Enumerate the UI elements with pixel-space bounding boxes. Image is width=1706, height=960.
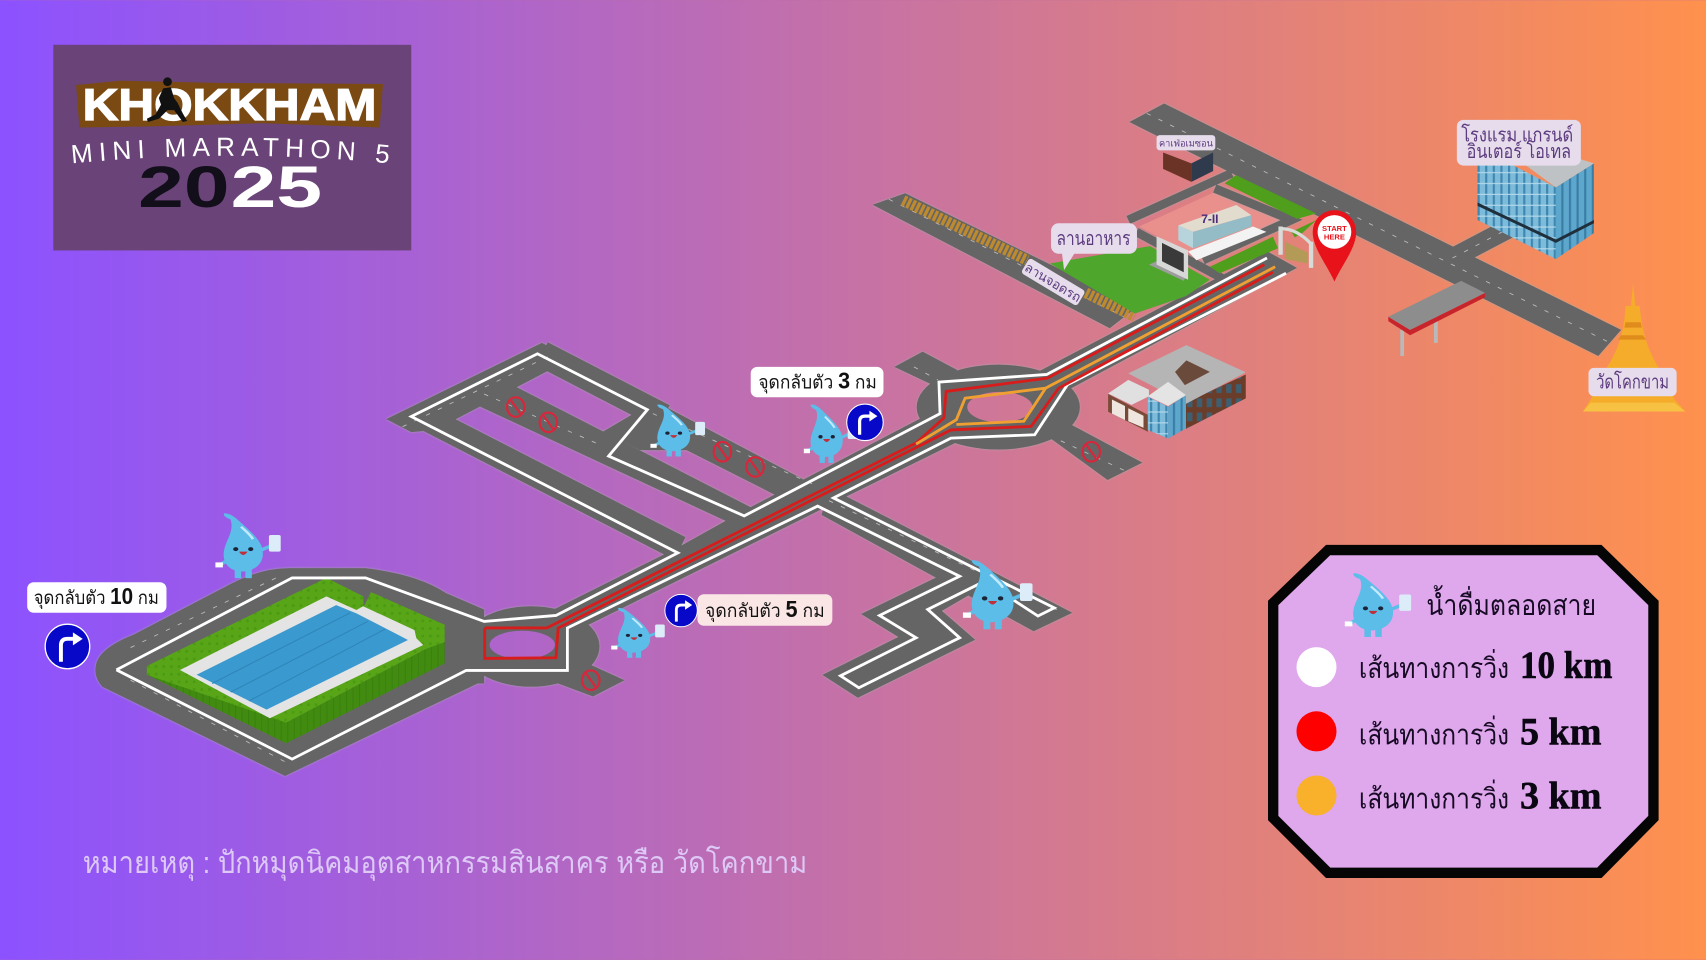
road: south-east long xyxy=(821,492,1072,631)
roundabout: north-east xyxy=(917,365,1080,450)
logo year xyxy=(138,155,322,220)
office low wing facade xyxy=(1108,394,1148,432)
label: hotel xyxy=(1457,120,1581,166)
start pin: START xyxy=(1322,224,1347,233)
road: south-east stub xyxy=(1039,419,1142,480)
lawn xyxy=(1050,246,1210,314)
route 10 km white xyxy=(116,258,1286,759)
pagoda xyxy=(1583,283,1685,411)
road: north-west stub xyxy=(894,352,957,386)
mascot: water drop 5 km xyxy=(611,608,665,658)
mascot: water drop by park xyxy=(215,513,281,578)
gas station xyxy=(1388,281,1485,356)
office glass tower xyxy=(1148,397,1168,438)
logo year: 20 xyxy=(138,155,230,220)
hotel left face xyxy=(1478,147,1556,259)
route 3 km orange xyxy=(916,267,1275,444)
road: hotel access xyxy=(1452,225,1515,258)
road: park loop xyxy=(95,568,484,776)
road network xyxy=(95,104,1621,776)
park with pool xyxy=(147,578,445,743)
road: service loop xyxy=(1128,173,1291,279)
icon: runner xyxy=(147,77,187,122)
hotel dark band xyxy=(1478,203,1594,243)
lane dashes xyxy=(131,113,1610,762)
building: cafe xyxy=(1157,135,1215,182)
building: office block xyxy=(1108,345,1246,438)
label: temple: วัดโคกขาม xyxy=(1596,371,1669,394)
legend 10 km: เส้นทางการวิ่ง xyxy=(1359,649,1509,684)
pool water xyxy=(197,605,408,710)
roundabout: south-west xyxy=(462,606,599,687)
callout: u-turn 5 km: จุดกลับตัว 5 กม xyxy=(705,596,825,623)
icon: turn sign 10 km xyxy=(45,624,90,669)
road: parking lot xyxy=(873,193,1137,328)
convenience store lot xyxy=(1139,193,1284,261)
footnote: หมายเหตุ : ปักหมุดนิคมอุตสาหกรรมสินสาคร หรือ วัดโคกขาม xyxy=(83,845,807,882)
legend water: น้ำดื่มตลอดสาย xyxy=(1426,585,1596,621)
hedge side xyxy=(147,642,445,743)
parking row xyxy=(903,200,1135,317)
logo subtitle: MINI MARATHON 5 xyxy=(72,138,388,164)
road: upper long xyxy=(542,354,664,417)
road: small stub xyxy=(549,658,625,697)
legend 5 km: เส้นทางการวิ่ง xyxy=(1359,715,1509,750)
billboard xyxy=(1149,236,1188,281)
legend mascot xyxy=(1345,573,1411,637)
legend 10 km: 10 km xyxy=(1520,644,1612,687)
legend 3 km xyxy=(1296,775,1602,818)
road: top highway xyxy=(1129,104,1621,356)
hotel roof xyxy=(1523,159,1594,187)
callout: u-turn 10 km: จุดกลับตัว 10 กม xyxy=(34,583,159,610)
label: parking: ลานจอดรถ xyxy=(1022,260,1084,305)
mascot: water drop upper block xyxy=(650,404,705,456)
no-entry signs xyxy=(507,397,1100,690)
office main roof xyxy=(1128,345,1246,404)
label: cafe: คาเฟ่อเมซอน xyxy=(1159,139,1214,149)
lane lines xyxy=(212,613,385,701)
legend 3 km: เส้นทางการวิ่ง xyxy=(1359,780,1509,815)
building: 7-Eleven xyxy=(1178,205,1266,260)
legend panel xyxy=(1273,550,1653,873)
label: food court: ลานอาหาร xyxy=(1056,228,1130,250)
logo year: 25 xyxy=(231,155,322,220)
roundabout islands xyxy=(490,392,1033,659)
label: 7-11: 7-II xyxy=(1201,212,1219,226)
hotel right face xyxy=(1556,163,1594,259)
logo panel xyxy=(53,44,412,250)
legend 5 km: 5 km xyxy=(1520,710,1602,753)
icon: turn sign 3 km xyxy=(847,404,883,441)
green strip south xyxy=(1210,237,1278,273)
road: lower long xyxy=(397,408,685,560)
road: upper block connector xyxy=(386,343,572,432)
logo title banner: KHOKKHAM xyxy=(83,81,376,130)
icon: turn sign 5 km xyxy=(665,594,697,627)
office courtyard xyxy=(1175,360,1210,385)
green strip corner xyxy=(1291,220,1316,237)
legend 5 km xyxy=(1296,710,1602,753)
mascot: water drop 3 km xyxy=(804,405,857,463)
mascot: water drop south-east xyxy=(963,560,1033,629)
callout: u-turn 3 km: จุดกลับตัว 3 กม xyxy=(758,368,877,395)
office low wing roof xyxy=(1108,380,1149,405)
office tower roof xyxy=(1148,382,1186,406)
pool deck xyxy=(180,596,423,718)
label: food court xyxy=(1051,223,1137,270)
road: zigzag branch xyxy=(840,576,974,688)
arch gate xyxy=(1278,226,1313,268)
route 5 km red xyxy=(485,265,1273,658)
green strip north xyxy=(1225,175,1316,219)
start pin xyxy=(1313,210,1356,282)
legend 3 km: 3 km xyxy=(1520,775,1602,818)
label: hotel: อินเตอร์ โอเทล xyxy=(1467,140,1571,163)
road: upper long continued with connector xyxy=(603,390,811,496)
office right facade xyxy=(1186,374,1246,429)
building: hotel xyxy=(1478,147,1594,259)
road: middle long xyxy=(479,379,751,524)
label: hotel: โรงแรม แกรนด์ xyxy=(1461,124,1573,147)
legend 10 km xyxy=(1296,644,1612,687)
hedge top xyxy=(147,578,445,723)
road: main south-west xyxy=(549,408,957,633)
start pin: HERE xyxy=(1324,233,1345,242)
road: main north-east xyxy=(1039,252,1297,390)
